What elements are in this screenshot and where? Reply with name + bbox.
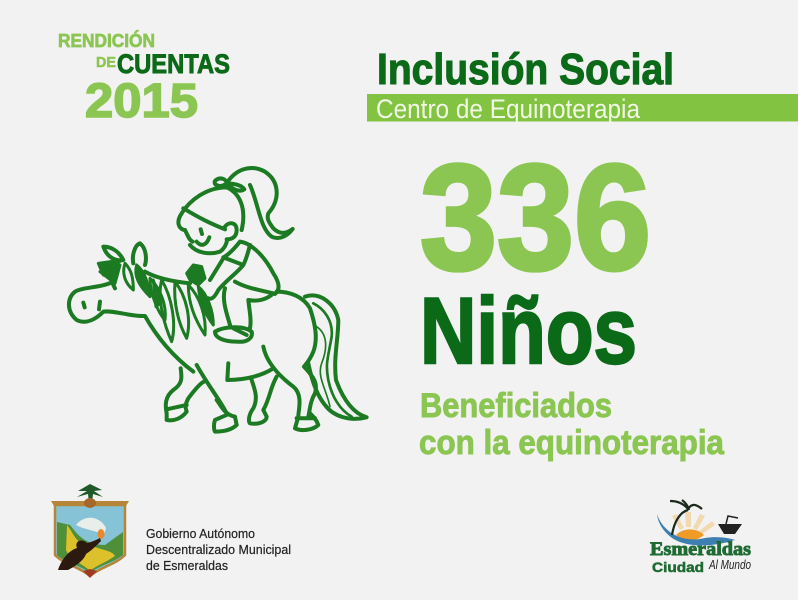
girl ponytail: [227, 168, 293, 238]
pony body: [277, 292, 316, 417]
label: Niños: Niños: [420, 278, 637, 383]
logo: Rendición de Cuentas 2015: CUENTAS: [117, 49, 230, 79]
pony head and neck: [69, 282, 193, 372]
text: Gobierno Autónomo Descentralizado Municipal de Esmeraldas: Gobierno Autónomo: [146, 527, 255, 541]
torch flame: [98, 529, 104, 539]
face: [197, 223, 237, 245]
girl torso and arms: [208, 242, 279, 299]
palm tree crest: [77, 484, 103, 503]
girl leg and shoe: [215, 282, 273, 342]
shield: [55, 505, 125, 576]
shield top bar: [51, 501, 129, 506]
figure with raised arm: [58, 538, 101, 570]
subtitle band: Centro de Equinoterapia: Centro de Equinoterapia: [376, 94, 641, 124]
green hillside: [57, 522, 123, 573]
text: Beneficiados con la equinoterapia: Beneficiados: [420, 387, 612, 425]
girl head: [178, 187, 243, 253]
palm tree: [670, 500, 702, 535]
Al Mundo: Al Mundo: [708, 557, 751, 572]
pony mane: [98, 260, 213, 342]
heading: Inclusión Social: Inclusión Social: [377, 45, 674, 94]
pony tail: [305, 295, 367, 419]
crest ornament: [84, 498, 96, 508]
shield base ornament: [83, 569, 97, 578]
logo: Rendición de Cuentas 2015: DE: [96, 54, 116, 71]
text: Beneficiados con la equinoterapia: [419, 387, 725, 462]
subtitle band: Centro de Equinoterapia: [367, 94, 798, 124]
Ciudad: Ciudad: [652, 560, 704, 575]
logo: Rendición de Cuentas 2015: RENDICIÓN: [58, 30, 155, 51]
text: Gobierno Autónomo Descentralizado Municipal de Esmeraldas: Descentralizado Municipal: [146, 543, 291, 557]
text: Beneficiados con la equinoterapia: con la equinoterapia: [419, 424, 725, 462]
logo: Rendición de Cuentas 2015: [58, 30, 230, 128]
sky and cloud: [76, 518, 106, 535]
logo: Esmeraldas Ciudad Al Mundo: [650, 500, 751, 575]
pony ears: [103, 243, 146, 265]
emblem: coat of arms of Esmeraldas: [51, 484, 129, 578]
sun: [676, 529, 704, 540]
text: Gobierno Autónomo Descentralizado Municipal de Esmeraldas: de Esmeraldas: [146, 559, 228, 573]
blue wave: [657, 514, 735, 545]
hair bow: [215, 178, 244, 191]
big number: 336: 336: [420, 133, 651, 301]
yellow vegetation: [66, 525, 115, 571]
logo: Rendición de Cuentas 2015: 2015: [85, 75, 198, 128]
pony legs and hooves: [166, 368, 204, 420]
sun rays: [672, 512, 715, 534]
text: Gobierno Autónomo Descentralizado Municipal de Esmeraldas: [146, 527, 291, 573]
boat: [718, 524, 742, 534]
icon: girl riding a pony: [69, 168, 367, 432]
wordmark: Esmeraldas: [650, 539, 751, 560]
